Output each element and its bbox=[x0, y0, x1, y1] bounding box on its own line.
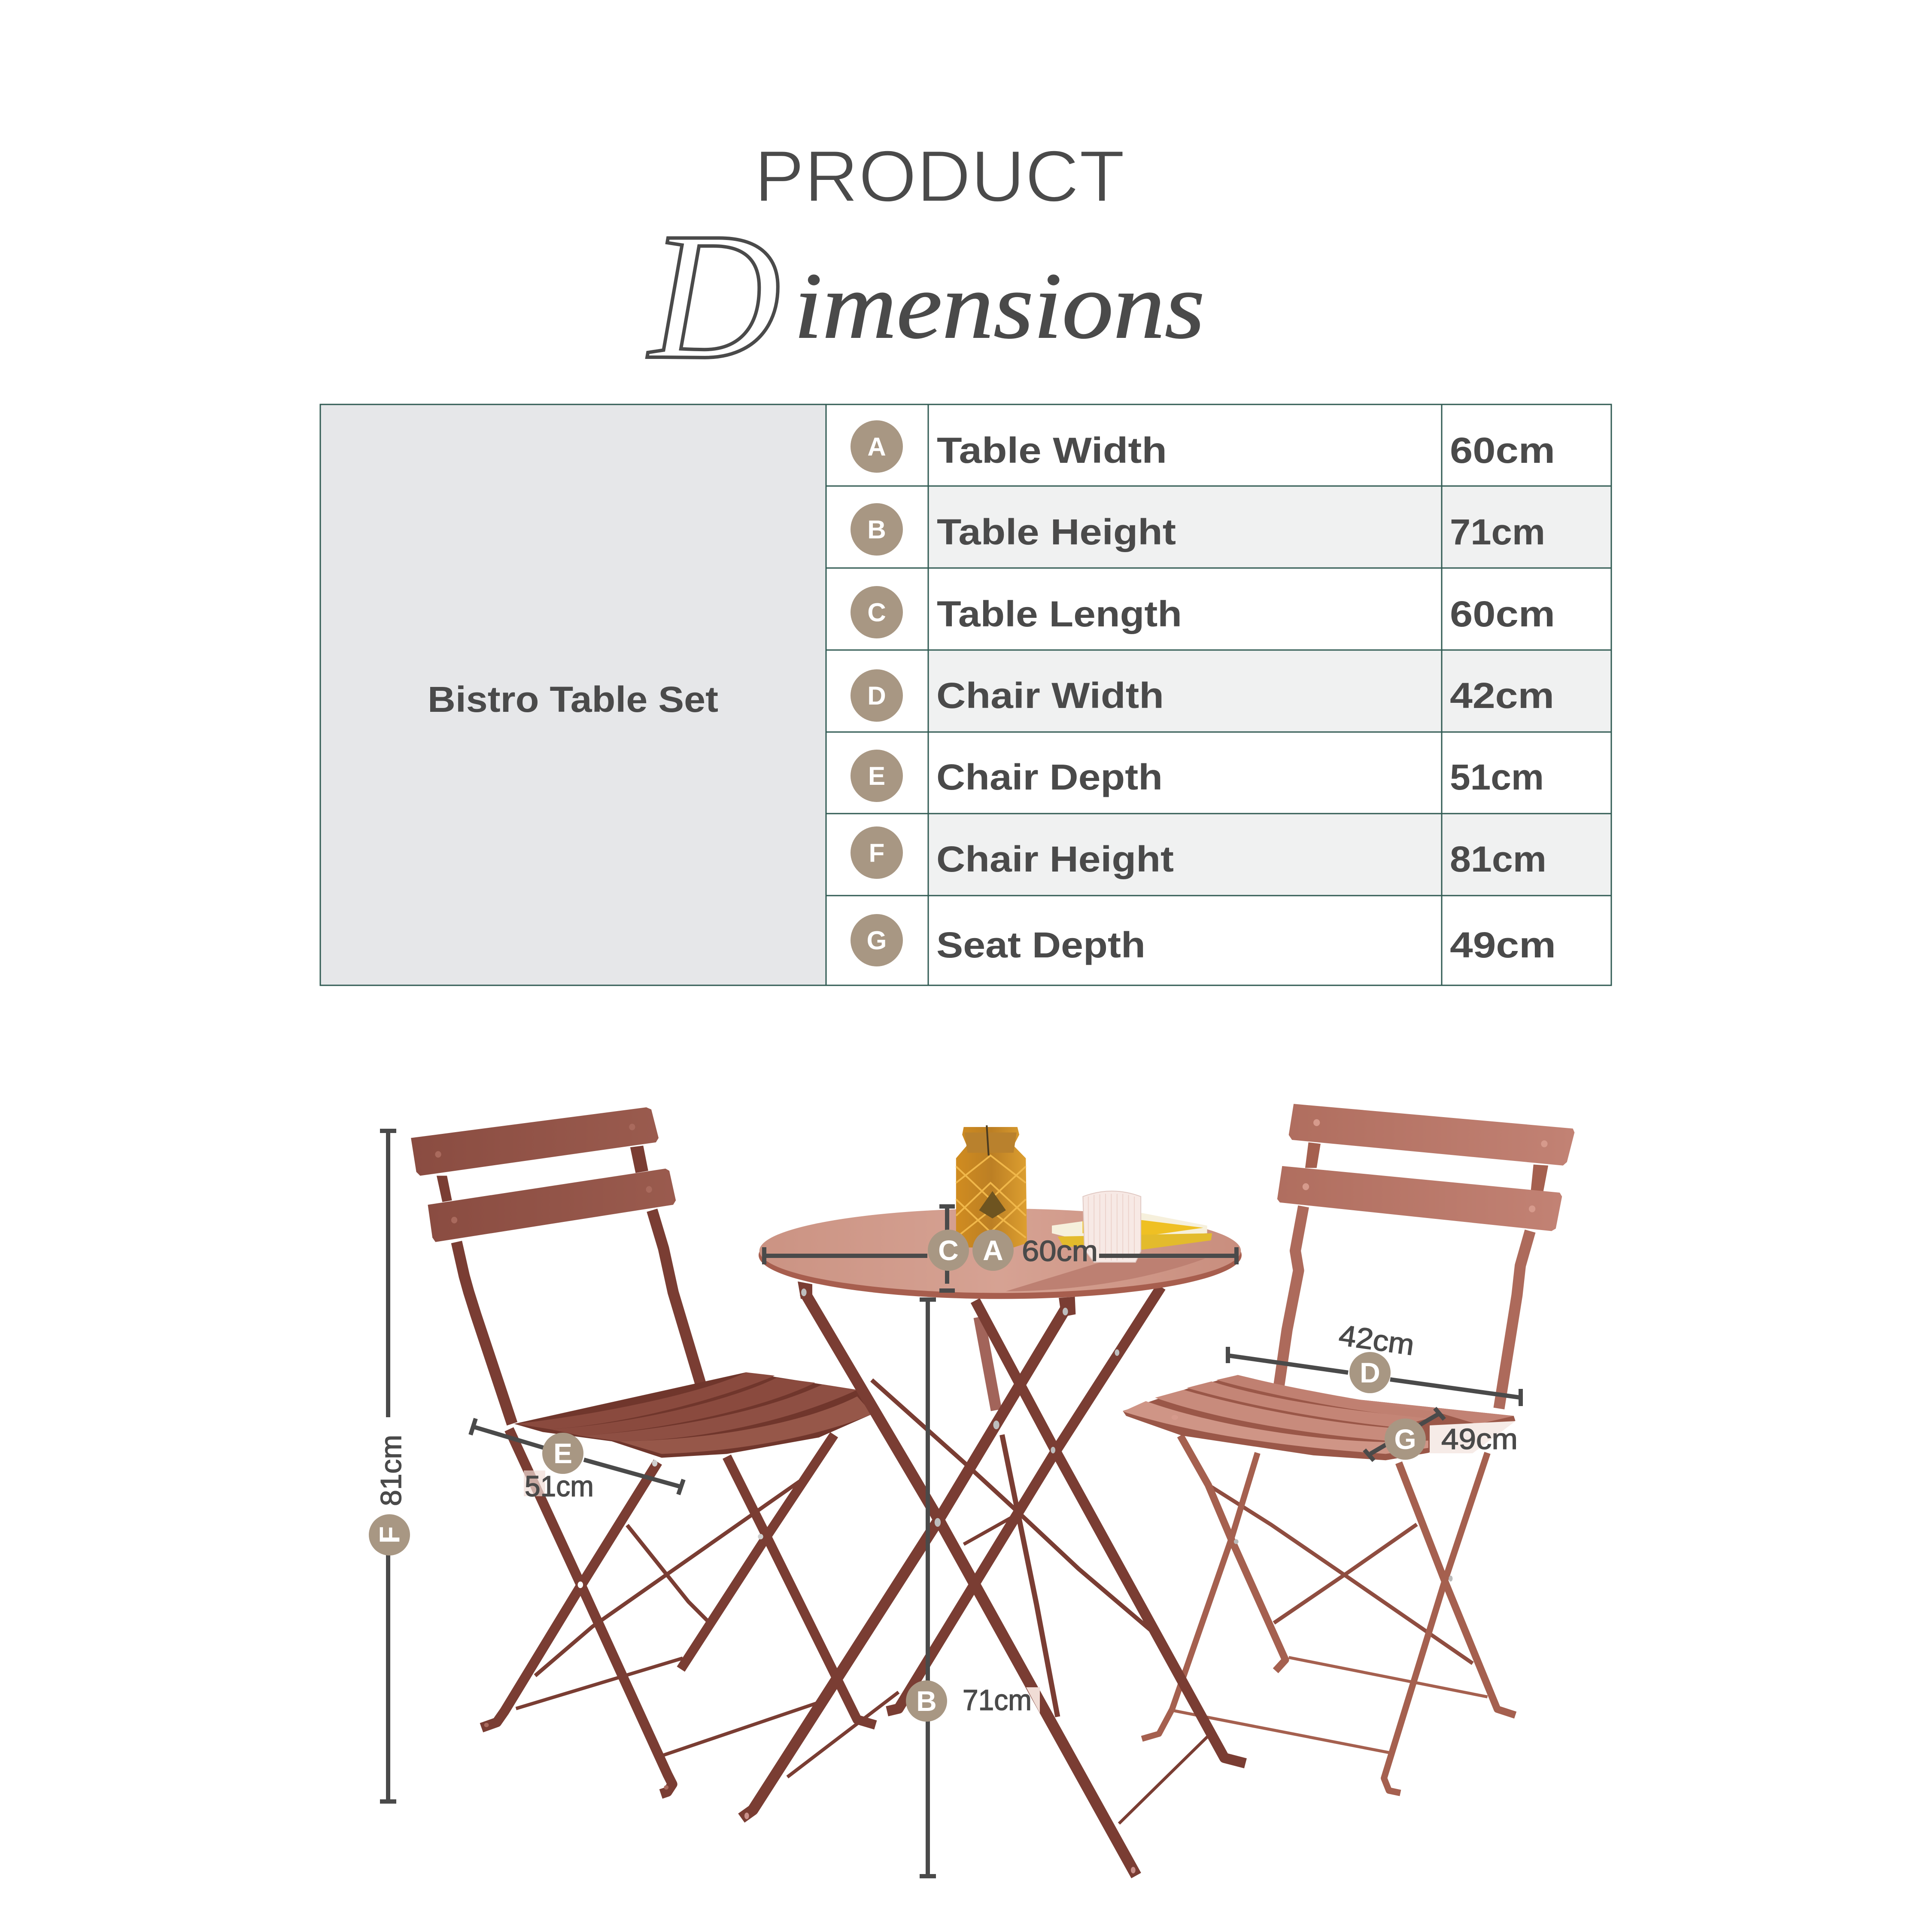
row D: chair width bbox=[851, 669, 1554, 722]
row F: chair height: Chair Height bbox=[936, 839, 1174, 879]
row B: table height: 71cm bbox=[1450, 512, 1545, 552]
chair screws bbox=[435, 1124, 763, 1789]
row E: chair depth bbox=[851, 750, 1544, 802]
dimension B: table height bbox=[906, 1300, 1040, 1876]
row A: table width: A bbox=[867, 432, 886, 461]
panel: product name cell bbox=[320, 404, 826, 985]
back slats bbox=[1277, 1104, 1574, 1231]
back uprights bbox=[456, 1242, 512, 1424]
dimension G: seat depth: 49cm bbox=[1441, 1423, 1518, 1455]
dimension D: chair width: D bbox=[1360, 1357, 1380, 1388]
row D: chair width: Chair Width bbox=[936, 675, 1164, 716]
dimension A and C: table width and length: C bbox=[938, 1234, 959, 1266]
books bbox=[1052, 1213, 1212, 1250]
row A: table width bbox=[851, 420, 1555, 473]
dimension A and C: table width and length bbox=[764, 1206, 1236, 1291]
chair legs and braces bbox=[1142, 1206, 1530, 1793]
row D: chair width: D bbox=[867, 681, 886, 710]
dimension F: chair height: F bbox=[374, 1526, 405, 1543]
table brackets and screws bbox=[744, 1282, 1136, 1874]
dimension D: chair width: 42cm bbox=[1337, 1319, 1416, 1361]
title bbox=[646, 136, 1205, 397]
row D: chair width: 42cm bbox=[1450, 675, 1554, 716]
chair screws bbox=[1172, 1119, 1548, 1582]
row E: chair depth: 51cm bbox=[1450, 757, 1544, 797]
left chair bbox=[411, 1107, 875, 1794]
row B: table height bbox=[851, 503, 1545, 556]
row G: seat depth bbox=[851, 914, 1556, 966]
back uprights bbox=[1279, 1206, 1303, 1386]
dimension A and C: table width and length: 60cm bbox=[1022, 1235, 1098, 1267]
dimension B: table height: B bbox=[916, 1685, 937, 1717]
row B: table height: Table Height bbox=[937, 512, 1176, 552]
row G: seat depth: G bbox=[867, 926, 887, 955]
dimension F: chair height: 81cm bbox=[375, 1435, 407, 1506]
heading: Dimensions: D bbox=[646, 195, 781, 397]
row G: seat depth: 49cm bbox=[1450, 925, 1556, 965]
row F: chair height: F bbox=[869, 838, 884, 867]
panel: product name cell: Bistro Table Set bbox=[428, 679, 718, 720]
heading: PRODUCT: PRODUCT bbox=[754, 136, 1125, 217]
dimension B: table height: 71cm bbox=[963, 1684, 1032, 1716]
dimension F: chair height bbox=[369, 1131, 410, 1801]
jar bbox=[956, 1125, 1027, 1248]
heading: Dimensions: imensions bbox=[794, 253, 1205, 358]
dimension A and C: table width and length: A bbox=[983, 1234, 1003, 1266]
right chair bbox=[1123, 1104, 1574, 1793]
table top bbox=[759, 1209, 1242, 1299]
dimension D: chair width bbox=[1227, 1319, 1521, 1406]
dimension E: chair depth: E bbox=[553, 1437, 572, 1469]
seat slats bbox=[1123, 1375, 1516, 1460]
row A: table width: Table Width bbox=[937, 430, 1167, 471]
row C: table length bbox=[851, 586, 1555, 638]
row E: chair depth: E bbox=[868, 762, 885, 790]
row G: seat depth: Seat Depth bbox=[936, 925, 1145, 965]
dimension E: chair depth bbox=[471, 1419, 683, 1503]
glass bbox=[1083, 1191, 1141, 1262]
row C: table length: Table Length bbox=[937, 594, 1182, 634]
dimension E: chair depth: 51cm bbox=[525, 1470, 594, 1503]
table legs and braces bbox=[741, 1287, 1245, 1876]
dimension G: seat depth: G bbox=[1394, 1423, 1416, 1455]
row B: table height: B bbox=[867, 515, 886, 544]
dimension G: seat depth bbox=[1364, 1408, 1518, 1461]
row C: table length: C bbox=[867, 598, 886, 627]
row E: chair depth: Chair Depth bbox=[936, 757, 1163, 797]
row F: chair height: 81cm bbox=[1450, 839, 1546, 879]
seat slats bbox=[514, 1372, 872, 1458]
dimensions table bbox=[320, 404, 1611, 985]
row F: chair height bbox=[851, 826, 1546, 879]
table bbox=[741, 1125, 1245, 1876]
row A: table width: 60cm bbox=[1450, 430, 1555, 471]
back slats bbox=[411, 1107, 676, 1242]
row shading bbox=[928, 486, 1611, 896]
chair legs and braces bbox=[456, 1210, 875, 1794]
row C: table length: 60cm bbox=[1450, 594, 1555, 634]
